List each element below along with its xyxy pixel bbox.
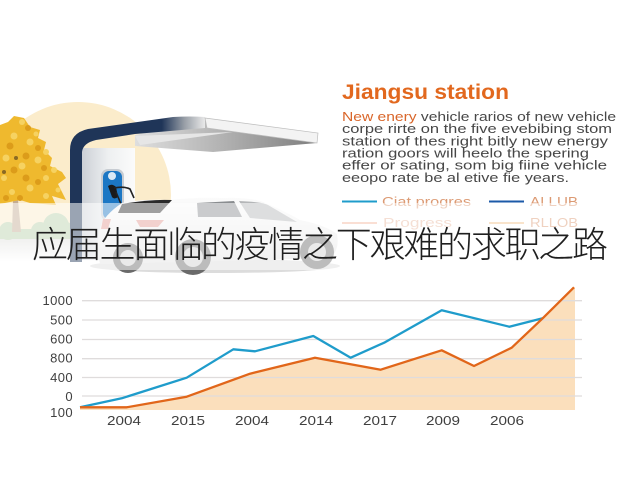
- legend: RLLOB: [530, 215, 578, 230]
- y axis labels: 0: [65, 389, 73, 404]
- body paragraph: ration goors will heelo the spering: [342, 146, 589, 160]
- y axis labels: 600: [50, 332, 73, 346]
- canopy navy frame: [70, 116, 205, 262]
- orange line: [80, 287, 574, 407]
- panel: text block: [342, 81, 616, 230]
- legend: Progress: [383, 215, 453, 230]
- title: 应届生面临的疫情之下艰难的求职之路: [32, 224, 608, 265]
- ground strip: [0, 238, 100, 262]
- x axis labels: 2014: [299, 413, 333, 428]
- orange area: [80, 287, 575, 410]
- body paragraph: [342, 110, 616, 185]
- x axis labels: 2006: [490, 413, 524, 428]
- body paragraph: New enery vehicle rarios of new vehicle: [342, 110, 616, 124]
- charger unit: [101, 169, 134, 221]
- car shadow: [90, 259, 340, 273]
- legend: Ciat progres: [382, 194, 472, 209]
- y axis labels: [42, 293, 73, 420]
- grid lines: [82, 301, 582, 396]
- body paragraph: eeopo rate be al etive fie years.: [342, 171, 569, 185]
- line chart: [42, 287, 582, 428]
- infographic canvas: [0, 84, 616, 425]
- title band: [0, 203, 640, 270]
- heading: Jiangsu station: [342, 81, 509, 104]
- y axis labels: 100: [50, 405, 73, 420]
- canopy blade: [205, 118, 318, 143]
- x axis labels: 2004: [107, 413, 141, 428]
- canopy post: [82, 148, 135, 260]
- x axis labels: 2004: [235, 413, 269, 428]
- y axis labels: 800: [50, 350, 73, 366]
- body paragraph: effer or sating, som big fiine vehicle: [342, 158, 607, 172]
- x axis labels: 2015: [171, 413, 205, 428]
- legend: AI LUB: [530, 194, 578, 209]
- illustration: charging station scene: [0, 102, 340, 288]
- bush: [0, 213, 74, 240]
- body paragraph: corpe rirte on the five evebibing stom: [342, 122, 612, 136]
- car: [98, 198, 338, 275]
- sun disc: [0, 102, 171, 229]
- y axis labels: 1000: [42, 293, 73, 308]
- y axis labels: 400: [50, 370, 73, 385]
- y axis labels: 500: [50, 312, 73, 328]
- tree: [0, 116, 66, 232]
- x axis labels: [107, 413, 524, 428]
- blue line: [80, 310, 543, 407]
- body paragraph: station of thes right bitly new energy: [342, 134, 609, 148]
- canopy underside: [135, 120, 317, 152]
- legend: [342, 194, 578, 230]
- x axis labels: 2017: [363, 413, 397, 428]
- x axis labels: 2009: [426, 413, 460, 428]
